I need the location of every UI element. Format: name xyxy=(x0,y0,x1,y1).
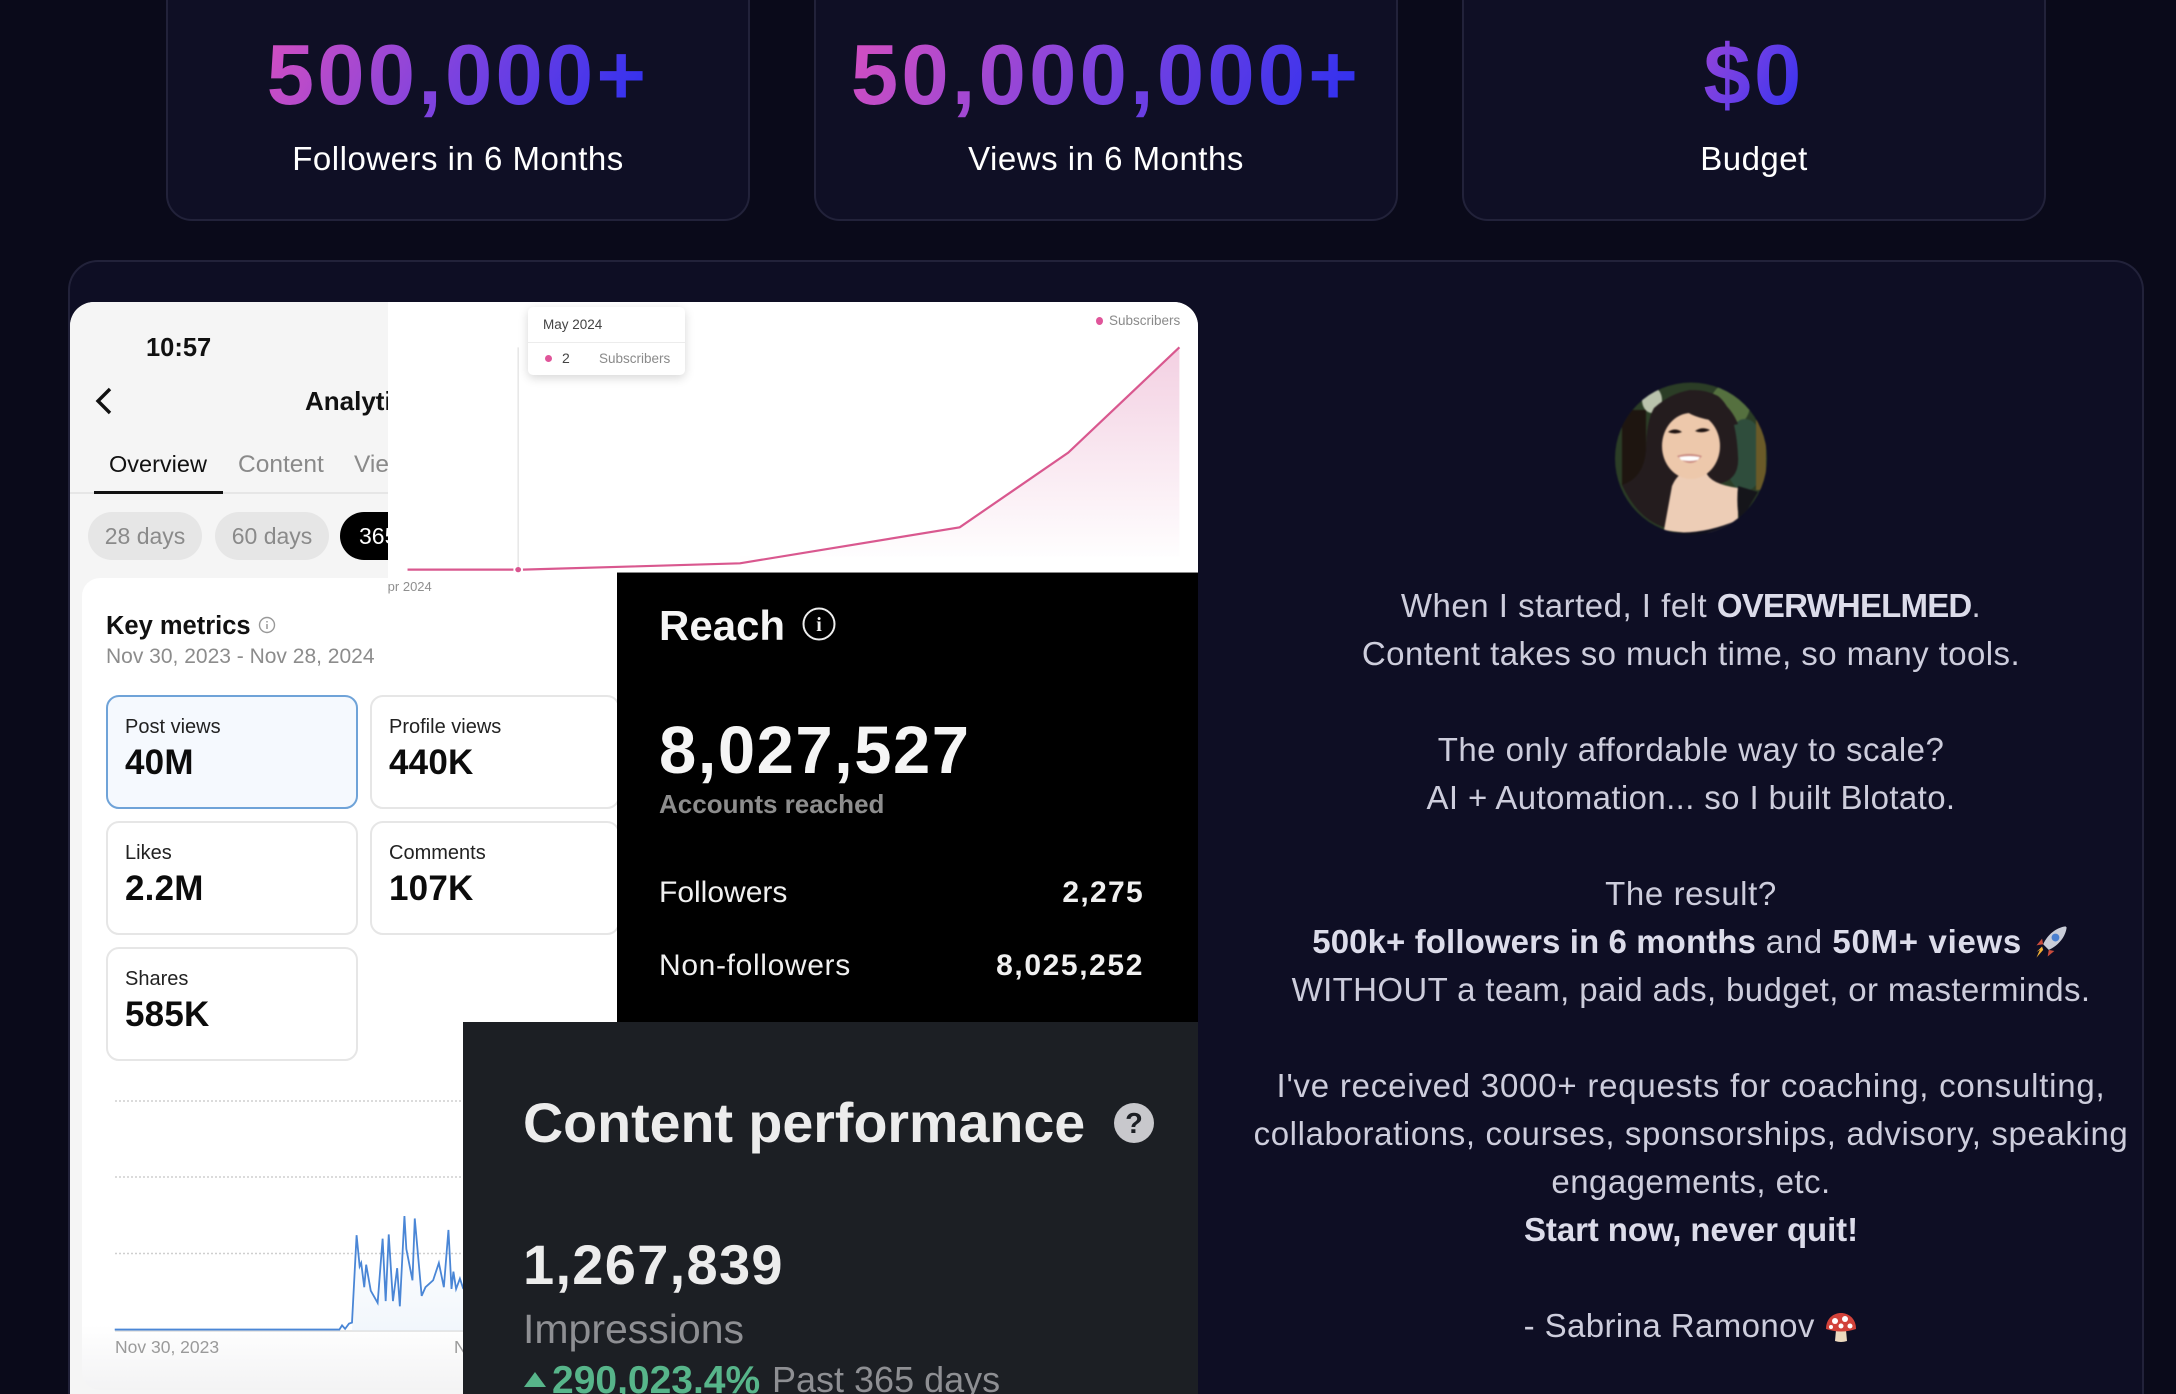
tab bar xyxy=(70,440,617,494)
label: Comments xyxy=(389,842,486,864)
stat number: 500,000+ xyxy=(267,28,649,123)
metric: shares xyxy=(106,947,358,1061)
screen title: Analytics xyxy=(305,386,421,416)
value: 440K xyxy=(389,743,473,782)
status bar time: 10:57 xyxy=(146,334,211,362)
value: 40M xyxy=(125,743,194,782)
screenshot: threads analytics xyxy=(70,302,617,1394)
metric: profile views xyxy=(370,695,620,809)
active tab underline xyxy=(94,491,223,494)
signature with mushroom: - Sabrina Ramonov xyxy=(1524,1307,1815,1344)
stat number: 50,000,000+ xyxy=(851,28,1361,123)
label: Likes xyxy=(125,842,172,864)
pill: 28 days: 28 days xyxy=(105,523,185,549)
pill: 28 days xyxy=(88,512,202,560)
screenshot: reach xyxy=(617,572,1198,1022)
icon: info xyxy=(258,616,276,634)
date range: Nov 30, 2023 - Nov 28, 2024 xyxy=(106,645,375,668)
story line: Content takes so much time, so many tools. xyxy=(1362,635,2020,672)
tooltip value: 2 xyxy=(562,350,570,366)
value: 585K xyxy=(125,995,209,1034)
label: Shares xyxy=(125,968,188,990)
content performance heading: Content performance xyxy=(523,1092,1085,1154)
label: Profile views xyxy=(389,716,501,738)
story line: When I started, I felt OVERWHELMED. xyxy=(1401,587,1981,624)
stat card: followers xyxy=(166,0,750,221)
pill: 60 days: 60 days xyxy=(232,523,312,549)
tooltip xyxy=(528,307,685,375)
tab: overview: Overview xyxy=(109,451,207,477)
story line: The result? xyxy=(1605,875,1777,912)
story line: collaborations, courses, sponsorships, advisory, speaking xyxy=(1254,1115,2128,1152)
followers row label: Followers xyxy=(659,876,787,909)
followers row value: 2,275 xyxy=(1062,876,1144,909)
non-followers row label: Non-followers xyxy=(659,949,851,982)
story line: WITHOUT a team, paid ads, budget, or masterminds. xyxy=(1292,971,2090,1008)
tooltip divider xyxy=(528,342,685,343)
stat label: Views in 6 Months xyxy=(968,140,1244,177)
area chart: subscribers xyxy=(408,346,1180,572)
reach heading: Reach xyxy=(659,602,785,649)
tab: views: Views xyxy=(354,451,419,478)
stat label: Budget xyxy=(1700,140,1808,177)
legend dot xyxy=(1096,317,1103,325)
tooltip date: May 2024 xyxy=(543,317,602,332)
label: Post views xyxy=(125,716,221,738)
pill: 365 days xyxy=(340,512,454,560)
story line: engagements, etc. xyxy=(1551,1163,1831,1200)
metric: post views xyxy=(106,695,358,809)
analytics screenshots collage xyxy=(70,302,1198,1394)
icon: back chevron xyxy=(96,388,112,414)
stat number: $0 xyxy=(1704,28,1804,123)
metric: comments xyxy=(370,821,620,935)
chart axis end date: Nov xyxy=(454,1337,485,1357)
tab: content: Content xyxy=(238,451,324,478)
icon: avatar portrait xyxy=(1614,382,1768,534)
impressions caption: Impressions xyxy=(523,1306,744,1352)
legend label: Subscribers xyxy=(1109,313,1180,328)
reach value: 8,027,527 xyxy=(659,713,971,788)
icon: help circle xyxy=(1114,1103,1154,1143)
icon: info circle xyxy=(802,608,836,640)
screenshot: content performance xyxy=(463,1022,1198,1394)
icon: up triangle xyxy=(524,1372,546,1387)
chart axis start date: Nov 30, 2023 xyxy=(115,1337,219,1357)
key metrics heading: Key metrics xyxy=(106,612,251,640)
pill: 365 days: 365 days xyxy=(359,523,452,549)
icon: help circle: ? xyxy=(1125,1108,1143,1140)
line chart: post views xyxy=(114,1100,463,1332)
key metrics card xyxy=(82,578,642,1390)
value: 2.2M xyxy=(125,869,204,908)
story line: I've received 3000+ requests for coaching, consulting, xyxy=(1276,1067,2105,1104)
non-followers row value: 8,025,252 xyxy=(996,949,1144,982)
story text block xyxy=(1254,587,2128,1344)
icon: info circle: i xyxy=(816,614,822,636)
story line: The only affordable way to scale? xyxy=(1438,731,1944,768)
story line with rocket: 500k+ followers in 6 months and 50M+ views xyxy=(1312,923,2022,960)
impressions value: 1,267,839 xyxy=(523,1233,784,1296)
panel: story xyxy=(68,260,2144,1394)
screenshot: subscribers chart xyxy=(388,302,1198,580)
tooltip dot xyxy=(545,355,552,362)
value: 107K xyxy=(389,869,473,908)
tooltip series: Subscribers xyxy=(599,351,670,366)
story line bold: Start now, never quit! xyxy=(1524,1211,1858,1248)
story line: AI + Automation... so I built Blotato. xyxy=(1426,779,1956,816)
pill: 60 days xyxy=(215,512,329,560)
stat card: views xyxy=(814,0,1398,221)
metric: likes xyxy=(106,821,358,935)
stat card: budget xyxy=(1462,0,2046,221)
stat label: Followers in 6 Months xyxy=(292,140,624,177)
reach caption: Accounts reached xyxy=(659,789,884,819)
